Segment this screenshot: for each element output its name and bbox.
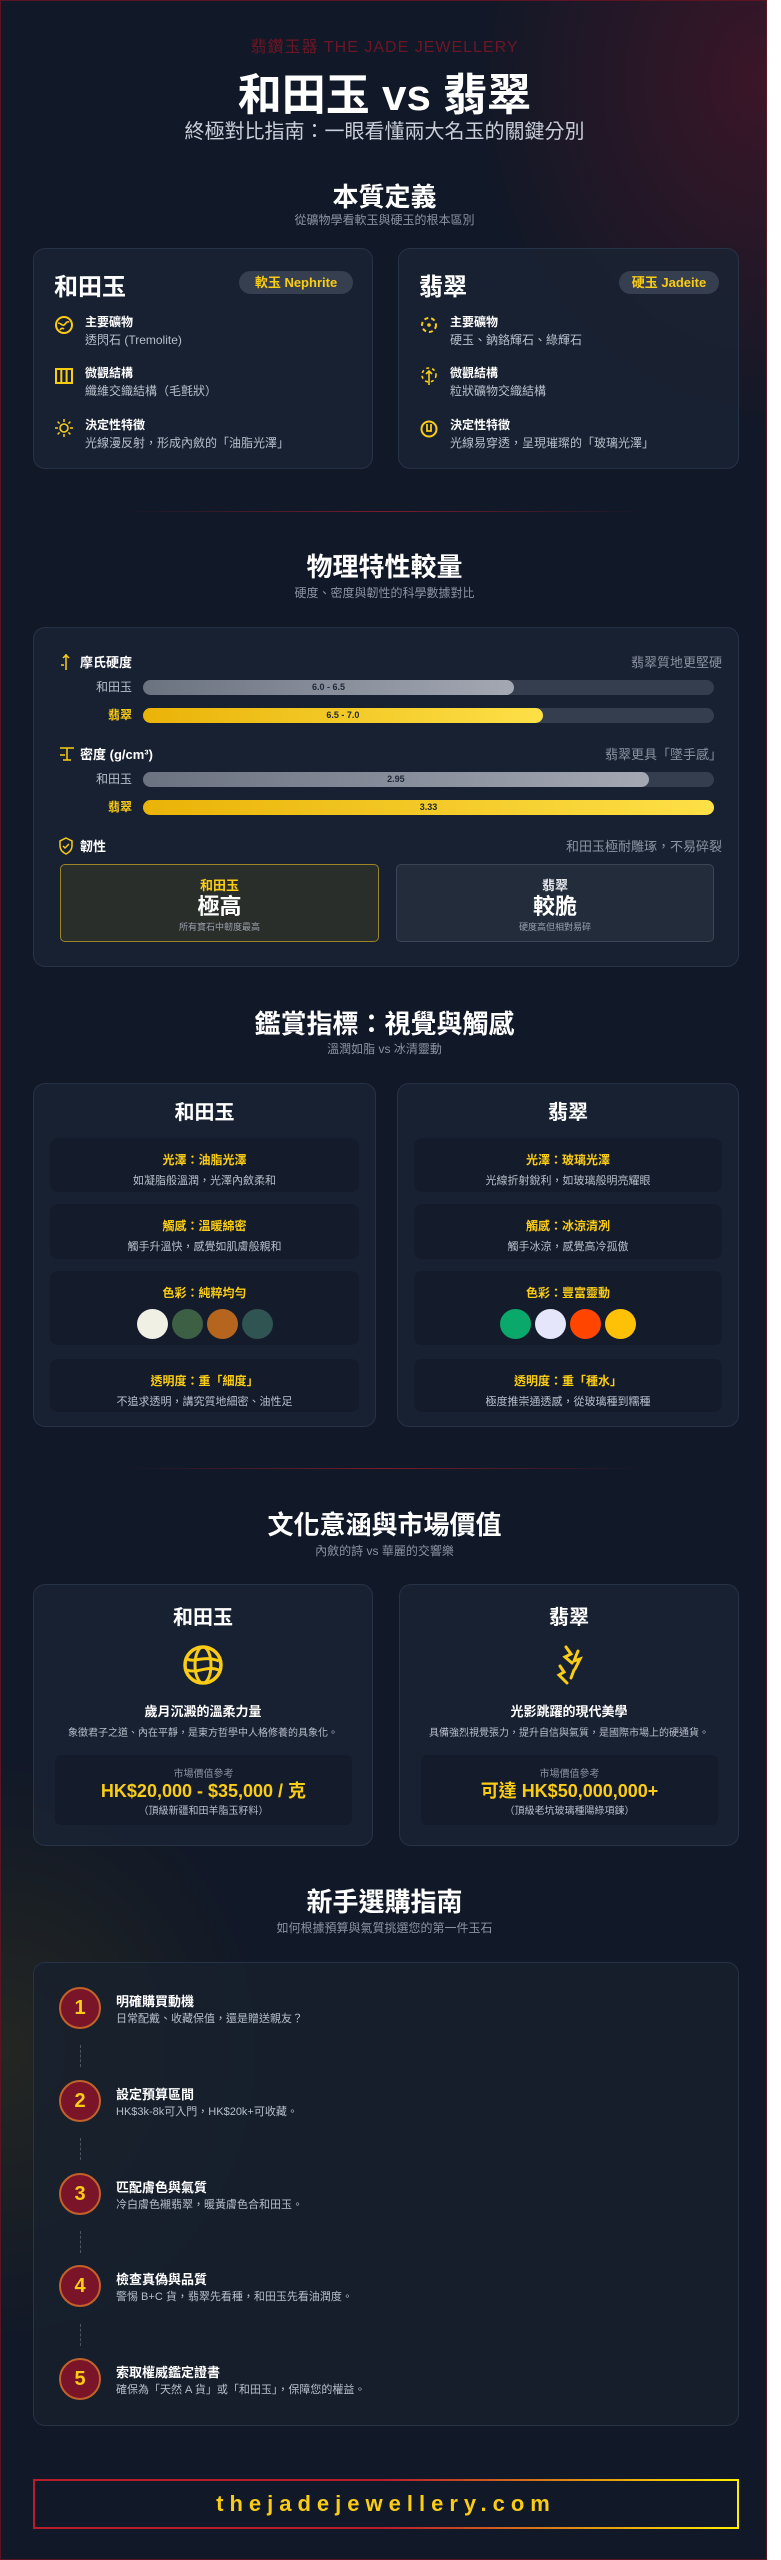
item: structure: 微觀結構 xyxy=(85,366,133,380)
bar chart: density: 和田玉 xyxy=(96,772,132,786)
section subtitle: 硬度、密度與韌性的科學數據對比 xyxy=(294,586,474,600)
toughness header: 和田玉極耐雕琢，不易碎裂 xyxy=(566,839,722,854)
footer: website xyxy=(33,2479,739,2529)
subtitle: 終極對比指南：一眼看懂兩大名玉的關鍵分別 xyxy=(184,121,584,143)
step 2: HK$3k-8k可入門，HK$20k+可收藏。 xyxy=(116,2106,298,2118)
toughness box: 翡翠: 較脆 xyxy=(533,894,577,919)
hardness header: 摩氏硬度 xyxy=(80,655,132,670)
density header: 密度 (g/cm³) xyxy=(80,747,153,762)
price box: 市場價值參考 xyxy=(174,1769,234,1780)
section heading: 新手選購指南: 新手選購指南 xyxy=(306,1887,462,1917)
price box xyxy=(55,1755,352,1825)
panel: 翡翠 culture xyxy=(399,1584,739,1846)
toughness box: 和田玉 xyxy=(60,864,379,942)
toughness box: 和田玉: 所有寶石中韌度最高 xyxy=(179,922,260,932)
footer: website: thejadejewellery.com xyxy=(216,2491,556,2516)
bar chart: density xyxy=(96,772,714,815)
item: feature xyxy=(55,418,289,450)
item: colour swatches: 色彩：豐富靈動 xyxy=(526,1286,610,1300)
title: 和田玉 vs 翡翠 xyxy=(238,71,531,120)
step 3: 3 xyxy=(74,2183,86,2205)
description: 具備強烈視覺張力，提升自信與氣質，是國際市場上的硬通貨。 xyxy=(429,1728,709,1739)
item: transparency: 極度推崇通透感，從玻璃種到糯種 xyxy=(486,1396,650,1408)
item: mineral: 主要礦物 xyxy=(450,315,498,329)
price box: 市場價值參考 xyxy=(540,1769,600,1780)
item: luster: 如凝脂般溫潤，光澤內斂柔和 xyxy=(133,1175,276,1187)
item: touch: 觸手升溫快，感覺如肌膚般親和 xyxy=(128,1241,282,1253)
price box: 可達 HK$50,000,000+ xyxy=(481,1781,658,1801)
item: transparency: 不追求透明，講究質地細密、油性足 xyxy=(116,1396,292,1408)
toughness box: 翡翠: 硬度高但相對易碎 xyxy=(519,922,591,932)
panel: 和田玉 appreciation xyxy=(33,1083,376,1427)
section subtitle: 溫潤如脂 vs 冰清靈動 xyxy=(327,1042,442,1056)
bar chart: hardness: 6.5 - 7.0 xyxy=(326,710,359,720)
item: mineral: 主要礦物 xyxy=(85,315,133,329)
step 3: 匹配膚色與氣質 xyxy=(116,2180,207,2195)
bar chart: density: 翡翠 xyxy=(108,800,132,814)
panel: 翡翠 definition xyxy=(398,248,739,469)
price box: （頂級新疆和田羊脂玉籽料） xyxy=(138,1806,268,1817)
item: transparency xyxy=(414,1359,722,1412)
item: feature xyxy=(420,418,654,450)
item: luster xyxy=(414,1138,722,1192)
step 1: 1 xyxy=(74,1997,86,2019)
item: touch: 觸感：冰涼清冽 xyxy=(526,1219,610,1233)
item: luster xyxy=(50,1138,359,1192)
panel: 和田玉 definition xyxy=(33,248,373,469)
brand line: 翡鑽玉器 THE JADE JEWELLERY xyxy=(250,39,519,56)
item: mineral: 硬玉、鈉鉻輝石、綠輝石 xyxy=(450,333,582,347)
step 2 xyxy=(59,2080,298,2122)
price box: （頂級老坑玻璃種陽綠項鍊） xyxy=(504,1806,634,1817)
item: luster: 光澤：油脂光澤 xyxy=(162,1153,246,1167)
item: structure: 粒狀礦物交織結構 xyxy=(450,384,546,398)
heading: 歲月沉澱的溫柔力量 xyxy=(144,1704,262,1719)
toughness box: 翡翠 xyxy=(396,864,714,942)
bar chart: hardness: 翡翠 xyxy=(108,708,132,722)
hardness header xyxy=(61,654,722,670)
item: colour swatches: 色彩：純粹均勻 xyxy=(162,1286,246,1300)
badge xyxy=(239,271,353,294)
badge xyxy=(619,271,719,294)
toughness box: 翡翠: 翡翠 xyxy=(542,878,568,893)
toughness box: 和田玉: 極高 xyxy=(197,894,242,919)
item: transparency: 透明度：重「種水」 xyxy=(514,1374,622,1388)
section heading: 鑑賞指標: 鑑賞指標：視覺與觸感 xyxy=(254,1009,514,1039)
item: mineral xyxy=(421,315,582,347)
step 4: 4 xyxy=(74,2275,86,2297)
step 5 xyxy=(59,2358,365,2400)
card title: 翡翠 xyxy=(549,1607,589,1629)
section heading: 本質定義: 本質定義 xyxy=(332,182,436,212)
panel: 翡翠 appreciation xyxy=(397,1083,739,1427)
section subtitle: 從礦物學看軟玉與硬玉的根本區別 xyxy=(294,213,474,227)
item: luster: 光線折射銳利，如玻璃般明亮耀眼 xyxy=(486,1175,650,1187)
icon: globe xyxy=(183,1645,223,1685)
panel: buying steps xyxy=(33,1962,739,2426)
hardness header: 翡翠質地更堅硬 xyxy=(631,655,722,670)
price box xyxy=(421,1755,718,1825)
step 5: 5 xyxy=(74,2368,86,2390)
step 4: 檢查真偽與品質 xyxy=(116,2272,207,2287)
section heading: 物理特性較量: 物理特性較量 xyxy=(306,552,462,582)
item: structure: 微觀結構 xyxy=(450,366,498,380)
description: 象徵君子之道、內在平靜，是東方哲學中人格修養的具象化。 xyxy=(68,1728,338,1739)
section subtitle: 如何根據預算與氣質挑選您的第一件玉石 xyxy=(276,1921,492,1935)
card title: 和田玉 xyxy=(173,1607,233,1629)
section heading: 文化意涵: 文化意涵與市場價值 xyxy=(267,1510,502,1540)
item: touch: 觸手冰涼，感覺高冷孤傲 xyxy=(508,1241,628,1253)
step 1: 明確購買動機 xyxy=(116,1994,194,2009)
step 3 xyxy=(59,2173,303,2215)
step 2: 2 xyxy=(74,2090,86,2112)
bar chart: hardness: 6.0 - 6.5 xyxy=(312,682,345,692)
toughness header xyxy=(59,837,722,855)
item: mineral xyxy=(55,315,182,347)
item: feature: 決定性特徵 xyxy=(85,418,145,432)
bar chart: hardness: 和田玉 xyxy=(96,680,132,694)
item: transparency xyxy=(50,1359,359,1412)
card title: 翡翠 xyxy=(548,1102,588,1124)
item: colour swatches xyxy=(50,1271,359,1345)
icon: sparkle xyxy=(556,1645,583,1685)
item: touch xyxy=(414,1204,722,1259)
panel: physical properties xyxy=(33,627,739,967)
card title: 和田玉 xyxy=(174,1102,234,1124)
step 5: 確保為「天然 A 貨」或「和田玉」，保障您的權益。 xyxy=(116,2384,365,2396)
item: feature: 光線漫反射，形成內斂的「油脂光澤」 xyxy=(85,436,289,450)
card title: 翡翠 xyxy=(419,274,467,301)
item: touch xyxy=(50,1204,359,1259)
card title: 和田玉 xyxy=(54,274,126,301)
badge: 硬玉 Jadeite xyxy=(632,275,706,290)
item: colour swatches xyxy=(414,1271,722,1345)
item: structure: 纖維交織結構（毛氈狀） xyxy=(85,384,217,398)
section subtitle: 內斂的詩 vs 華麗的交響樂 xyxy=(315,1544,454,1558)
step 1 xyxy=(59,1987,303,2029)
toughness box: 和田玉: 和田玉 xyxy=(200,878,239,893)
badge: 軟玉 Nephrite xyxy=(255,275,337,290)
bar chart: hardness xyxy=(96,680,714,723)
density header: 翡翠更具「墜手感」 xyxy=(605,747,722,762)
step 2: 設定預算區間 xyxy=(116,2087,194,2102)
step 4: 警惕 B+C 貨，翡翠先看種，和田玉先看油潤度。 xyxy=(116,2291,353,2303)
step 5: 索取權威鑑定證書 xyxy=(116,2365,220,2380)
price box: HK$20,000 - $35,000 / 克 xyxy=(101,1781,306,1801)
heading: 光影跳躍的現代美學 xyxy=(510,1704,628,1719)
item: transparency: 透明度：重「細度」 xyxy=(150,1374,258,1388)
item: mineral: 透閃石 (Tremolite) xyxy=(85,333,182,347)
toughness header: 韌性 xyxy=(80,839,106,854)
step 4 xyxy=(59,2265,353,2307)
item: structure xyxy=(55,366,217,398)
step 3: 冷白膚色襯翡翠，暖黃膚色合和田玉。 xyxy=(116,2199,303,2211)
item: structure xyxy=(421,366,546,398)
item: feature: 決定性特徵 xyxy=(450,418,510,432)
item: touch: 觸感：溫暖綿密 xyxy=(162,1219,246,1233)
bar chart: density: 3.33 xyxy=(420,802,437,812)
panel: 和田玉 culture xyxy=(33,1584,373,1846)
bar chart: density: 2.95 xyxy=(387,774,405,784)
density header xyxy=(60,747,722,762)
item: luster: 光澤：玻璃光澤 xyxy=(526,1153,610,1167)
step 1: 日常配戴、收藏保值，還是贈送親友？ xyxy=(116,2013,303,2025)
item: feature: 光線易穿透，呈現璀璨的「玻璃光澤」 xyxy=(450,436,654,450)
